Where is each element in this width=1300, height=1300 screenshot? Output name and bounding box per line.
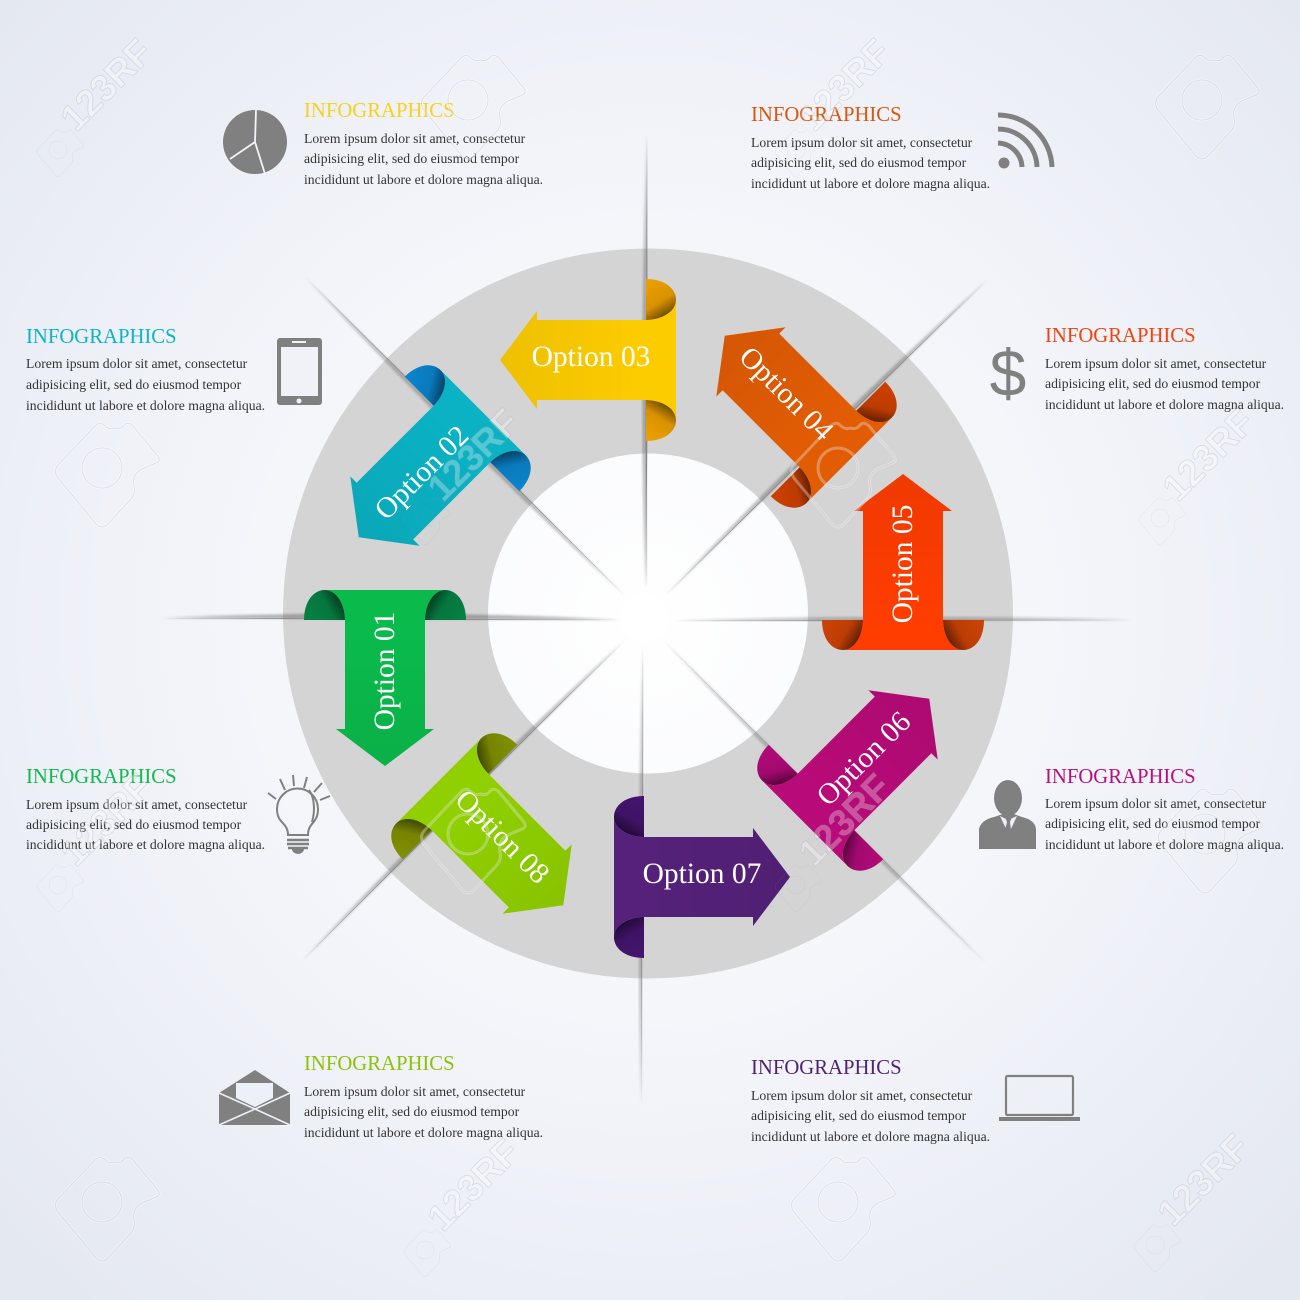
text block: lower right, magenta: incididunt ut labore et dolore magna aliqua. bbox=[1045, 837, 1284, 852]
slit: north-west bbox=[305, 277, 625, 596]
arrow: option 06 bbox=[748, 641, 987, 880]
slit: south-east bbox=[663, 640, 986, 963]
text block: left, teal: Lorem ipsum dolor sit amet, consectetur bbox=[26, 356, 248, 371]
slit: north bbox=[642, 135, 648, 590]
text block: lower left, green: incididunt ut labore et dolore magna aliqua. bbox=[26, 837, 265, 852]
arrow: option 08 bbox=[382, 724, 621, 963]
text block: right, red: Lorem ipsum dolor sit amet, consectetur bbox=[1045, 356, 1267, 371]
label: option 02: Option 02 bbox=[369, 420, 475, 526]
watermark: 123RF bbox=[37, 31, 160, 177]
watermark: 123RF bbox=[37, 766, 160, 912]
text block: bottom right, purple: INFOGRAPHICS bbox=[751, 1057, 902, 1079]
watermark: 123RF: 123RF bbox=[53, 31, 160, 139]
icon: wifi bbox=[998, 115, 1052, 168]
text block: lower left, green: adipisicing elit, sed do eiusmod tempor bbox=[26, 817, 242, 832]
text block: right, red: incididunt ut labore et dolore magna aliqua. bbox=[1045, 397, 1284, 412]
watermark: logo large bbox=[422, 55, 525, 159]
text block: top left, yellow bbox=[304, 100, 543, 187]
text block: top left, yellow: Lorem ipsum dolor sit amet, consectetur bbox=[304, 131, 526, 146]
text block: right, red: INFOGRAPHICS bbox=[1045, 325, 1196, 347]
label: option 05: Option 05 bbox=[887, 505, 919, 623]
text block: bottom right, purple: Lorem ipsum dolor sit amet, consectetur bbox=[751, 1088, 973, 1103]
text block: top left, yellow: incididunt ut labore et dolore magna aliqua. bbox=[304, 172, 543, 187]
text block: bottom left, lime: Lorem ipsum dolor sit amet, consectetur bbox=[304, 1084, 526, 1099]
label: option 08: Option 08 bbox=[449, 784, 555, 890]
watermark: 123RF: 123RF bbox=[420, 1131, 527, 1239]
text block: lower left, green bbox=[26, 766, 265, 852]
watermark: logo large bbox=[792, 423, 895, 527]
watermark: 123RF: 123RF bbox=[1155, 401, 1262, 509]
text block: lower left, green: INFOGRAPHICS bbox=[26, 766, 177, 788]
text block: right, red: adipisicing elit, sed do eiusmod tempor bbox=[1045, 376, 1261, 391]
slit: south bbox=[639, 645, 643, 1105]
arrow: option 01 bbox=[304, 590, 466, 766]
text block: left, teal: INFOGRAPHICS bbox=[26, 326, 177, 348]
text block: top right, orange bbox=[751, 104, 990, 191]
icon: person bbox=[979, 780, 1036, 849]
watermark: logo large bbox=[792, 1157, 895, 1261]
text block: left, teal: adipisicing elit, sed do eiusmod tempor bbox=[26, 377, 242, 392]
icon: light bulb bbox=[268, 775, 330, 854]
arrow: option 04 bbox=[667, 278, 906, 517]
text block: bottom right, purple: incididunt ut labore et dolore magna aliqua. bbox=[751, 1129, 990, 1144]
text block: lower right, magenta: adipisicing elit, sed do eiusmod tempor bbox=[1045, 816, 1261, 831]
watermark: logo large bbox=[1156, 55, 1259, 159]
watermark: 123RF: 123RF bbox=[420, 401, 527, 509]
arrow: option 02 bbox=[301, 356, 540, 595]
watermark: 123RF: 123RF bbox=[53, 766, 160, 874]
slit: west bbox=[162, 613, 622, 620]
label: option 06: Option 06 bbox=[811, 706, 917, 812]
watermark: logo large bbox=[1158, 789, 1262, 893]
icon: open envelope bbox=[219, 1070, 290, 1125]
watermark: 123RF: 123RF bbox=[1150, 1126, 1257, 1234]
label: option 01: Option 01 bbox=[369, 612, 401, 730]
text block: bottom left, lime: INFOGRAPHICS bbox=[304, 1053, 455, 1075]
text block: lower left, green: Lorem ipsum dolor sit amet, consectetur bbox=[26, 797, 248, 812]
watermark: 123RF bbox=[1134, 1126, 1257, 1272]
label: option 03: Option 03 bbox=[532, 341, 650, 373]
text block: left, teal: incididunt ut labore et dolore magna aliqua. bbox=[26, 398, 265, 413]
ring bbox=[386, 351, 910, 876]
text block: top left, yellow: INFOGRAPHICS bbox=[304, 100, 455, 122]
watermark: 123RF: 123RF bbox=[791, 31, 898, 139]
arrow: option 05 bbox=[822, 474, 984, 650]
icon: dollar: $ bbox=[990, 336, 1026, 410]
text block: bottom left, lime: incididunt ut labore et dolore magna aliqua. bbox=[304, 1125, 543, 1140]
text block: right, red bbox=[1045, 325, 1284, 412]
watermark: logo large bbox=[56, 423, 159, 527]
text block: bottom right, purple bbox=[751, 1057, 990, 1144]
text block: lower right, magenta: INFOGRAPHICS bbox=[1045, 766, 1196, 788]
label: option 04: Option 04 bbox=[733, 341, 839, 447]
watermark: 123RF bbox=[404, 1131, 527, 1277]
watermark: 123RF bbox=[775, 766, 898, 912]
text block: top left, yellow: adipisicing elit, sed do eiusmod tempor bbox=[304, 151, 520, 166]
watermark: 123RF: 123RF bbox=[791, 766, 898, 874]
slit: south-west bbox=[302, 640, 625, 961]
watermark: 123RF bbox=[775, 31, 898, 177]
text block: top right, orange: Lorem ipsum dolor sit amet, consectetur bbox=[751, 135, 973, 150]
icon: pie chart bbox=[223, 110, 287, 174]
centre glow bbox=[611, 584, 679, 652]
arrow: option 07 bbox=[614, 796, 790, 958]
text block: lower right, magenta bbox=[1045, 766, 1284, 852]
text block: bottom left, lime: adipisicing elit, sed do eiusmod tempor bbox=[304, 1104, 520, 1119]
text block: top right, orange: incididunt ut labore et dolore magna aliqua. bbox=[751, 176, 990, 191]
slit: east bbox=[672, 617, 1133, 621]
text block: top right, orange: adipisicing elit, sed do eiusmod tempor bbox=[751, 155, 967, 170]
watermark: logo large bbox=[422, 789, 525, 893]
text block: bottom left, lime bbox=[304, 1053, 543, 1140]
text block: lower right, magenta: Lorem ipsum dolor sit amet, consectetur bbox=[1045, 796, 1267, 811]
icon: phone bbox=[277, 338, 322, 405]
text block: bottom right, purple: adipisicing elit, sed do eiusmod tempor bbox=[751, 1108, 967, 1123]
slit: north-east bbox=[665, 279, 988, 596]
watermark: 123RF bbox=[404, 401, 527, 545]
watermark: logo large bbox=[56, 1157, 159, 1261]
watermark: 123RF bbox=[1139, 401, 1262, 545]
arrow: option 03 bbox=[500, 279, 676, 441]
icon: laptop bbox=[999, 1076, 1080, 1121]
text block: top right, orange: INFOGRAPHICS bbox=[751, 104, 902, 126]
text block: left, teal bbox=[26, 326, 265, 413]
label: option 07: Option 07 bbox=[643, 858, 761, 890]
